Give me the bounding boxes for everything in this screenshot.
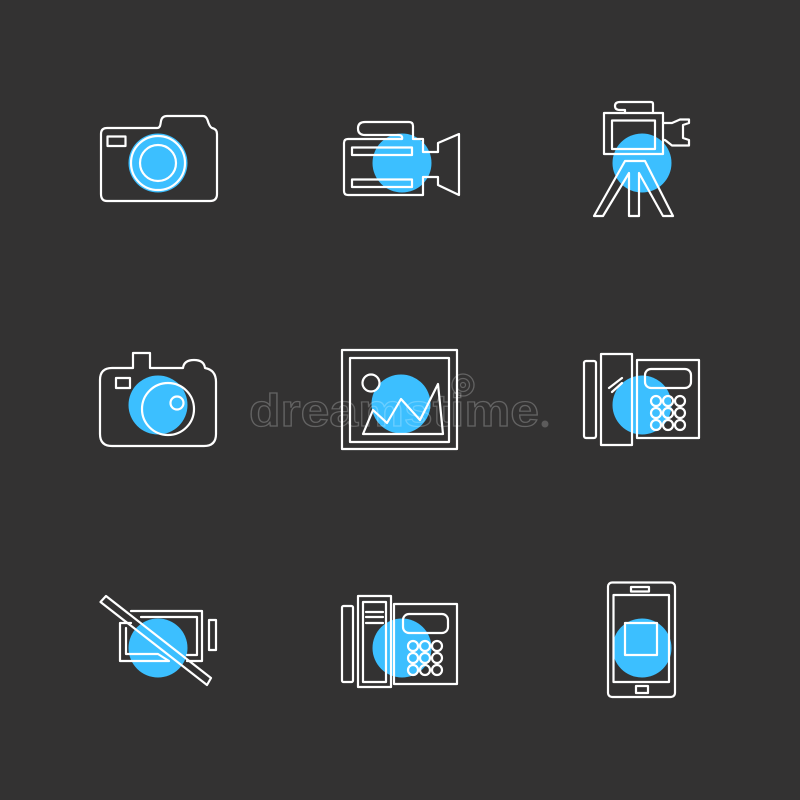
icon: office phone	[342, 596, 457, 687]
icon: desk phone	[584, 354, 699, 445]
watermark	[249, 374, 548, 436]
blue circle: row 1	[128, 134, 672, 192]
icon: no battery	[100, 596, 216, 685]
icon: framed picture	[342, 350, 457, 449]
icon: compact camera	[100, 353, 216, 446]
icon: smartphone	[608, 582, 675, 697]
watermark: dreamstime	[249, 385, 539, 436]
blue circle: row 3	[128, 618, 672, 678]
blue circle: row 2	[128, 374, 672, 434]
icon: video camera on tripod	[594, 102, 689, 216]
icon: photo camera	[101, 116, 217, 201]
icon: video camera	[344, 122, 459, 195]
